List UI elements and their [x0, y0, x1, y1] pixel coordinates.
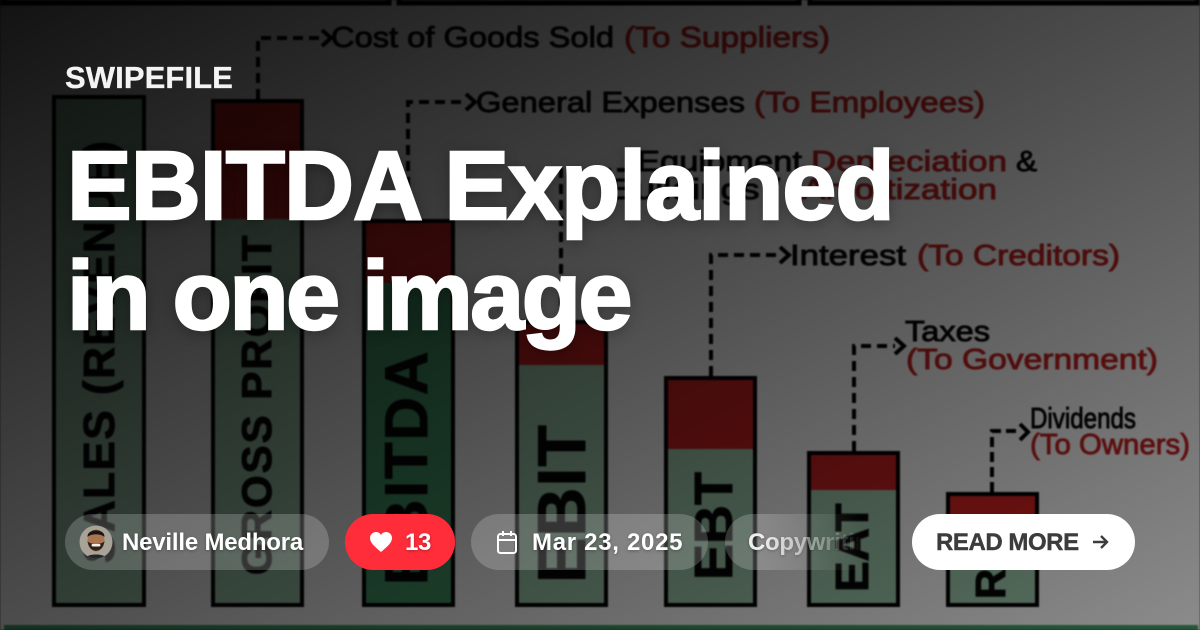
bar: sales: SALES (REVENUE) — [75, 140, 124, 563]
icon: author avatar — [80, 526, 112, 558]
read more button: READ MORE — [936, 529, 1079, 556]
recipient labels: Amortization — [802, 174, 997, 206]
expense labels: Equipment — [637, 146, 802, 178]
bar: gross profit — [213, 101, 302, 605]
expense labels: Cost of Goods Sold — [331, 22, 614, 54]
bottom green strip — [4, 625, 1198, 630]
likes pill — [345, 514, 455, 570]
expense labels — [331, 22, 1136, 435]
top cropped boxes — [3, 0, 1197, 3]
recipient labels: (To Owners) — [1030, 429, 1190, 461]
icon: arrow — [1093, 535, 1109, 549]
expense labels: Interest — [790, 240, 906, 272]
title: in one image — [67, 241, 630, 350]
author pill: Neville Medhora — [122, 529, 303, 556]
bar: EBT: EBT — [684, 472, 744, 580]
bar: EBITDA: EBITDA — [373, 350, 440, 585]
icon: heart — [370, 532, 392, 552]
author pill — [65, 514, 329, 570]
recipient labels: (To Creditors) — [917, 240, 1120, 272]
likes pill: 13 — [405, 529, 431, 556]
date pill — [471, 514, 708, 570]
recipient labels — [624, 22, 1190, 461]
title — [67, 131, 894, 353]
expense labels: & — [1016, 146, 1037, 178]
recipient labels: (To Government) — [906, 344, 1158, 376]
bar: EBIT — [517, 322, 606, 605]
recipient labels: (To Suppliers) — [624, 22, 830, 54]
bar: EAT — [809, 453, 898, 605]
expense labels: Dividends — [1030, 403, 1136, 435]
date pill: Mar 23, 2025 — [532, 529, 683, 556]
bar: EBITDA — [364, 221, 453, 605]
bar: EBIT: EBIT — [524, 424, 600, 583]
expense labels: Buildings / — [610, 174, 781, 206]
bar: sales — [54, 97, 144, 605]
expense labels: General Expenses — [476, 87, 745, 119]
bar: retained — [948, 494, 1037, 605]
recipient labels: Depreciation — [811, 146, 1007, 178]
title: EBITDA Explained — [67, 131, 894, 240]
category pill, fading out: Copywriting — [748, 529, 883, 556]
bar: EBT — [666, 378, 755, 605]
icon: calendar — [497, 531, 517, 554]
category label: SWIPEFILE — [65, 60, 233, 95]
recipient labels: (To Employees) — [754, 87, 985, 119]
dashed connectors — [258, 30, 1028, 492]
bar: EAT: EAT — [826, 503, 878, 592]
bar: gross profit: GROSS PROFIT — [233, 234, 280, 575]
read more button — [912, 514, 1135, 570]
bar: retained: RE — [967, 541, 1014, 599]
expense labels: Taxes — [905, 316, 990, 348]
